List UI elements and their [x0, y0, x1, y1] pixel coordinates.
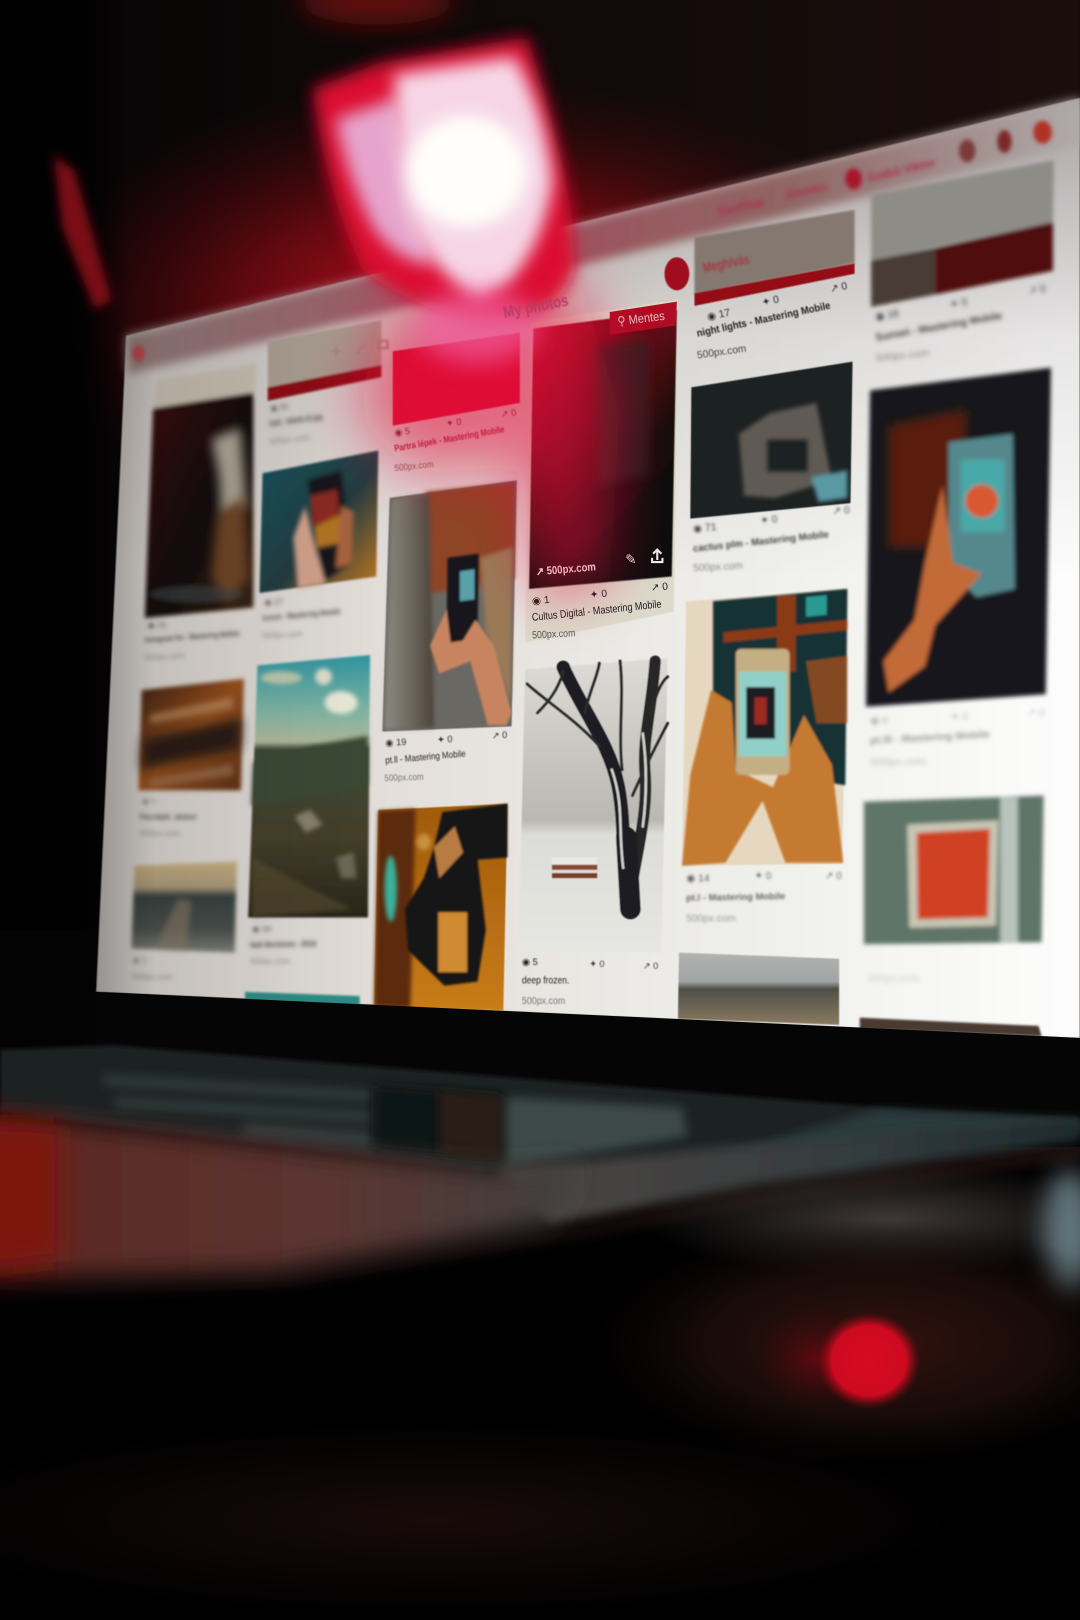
column 6 captions: ↗ 0	[1028, 284, 1047, 297]
table reflection blue edge	[1043, 1170, 1080, 1294]
column 6 captions: ◉ 0	[870, 716, 888, 727]
photo: city	[131, 862, 237, 953]
flare: pink tail onto screen	[418, 288, 537, 363]
column 1 captions: 500px.com	[140, 829, 180, 838]
photo: autumn foliage	[139, 679, 244, 790]
column 6 captions: pt.lll - Mastering Mobile	[870, 730, 990, 747]
photo: hand holding phone, dark	[866, 368, 1051, 707]
column 6 captions: ✦ 0	[949, 297, 968, 311]
red light spilling on screen	[357, 279, 620, 599]
flare: white core	[407, 116, 527, 227]
toolbar icons on card	[331, 341, 388, 356]
column 5 photos: Meghívás	[701, 252, 751, 276]
column 5 captions: 500px.com	[686, 914, 736, 925]
deck front edge	[496, 1120, 1080, 1223]
column 3 captions: pt.ll - Mastering Mobile	[385, 749, 466, 766]
top red blur	[300, 0, 455, 25]
keyboard key rows left	[103, 1074, 372, 1149]
keyboard reflection right	[506, 1097, 687, 1167]
column 1 captions: ◉ 31	[148, 620, 167, 630]
column 2 captions: DSC_00045-f2.jpg	[269, 412, 323, 429]
photo: mountain landscape	[248, 655, 370, 917]
column 5 captions	[686, 281, 851, 925]
photo: hands with phone, dark	[690, 362, 853, 519]
dim photo strip at bottom right	[860, 1018, 1042, 1036]
left lower shadow	[0, 930, 95, 1064]
page heading: My photos	[501, 291, 570, 322]
highlighted column 4 card: ↗ 0	[650, 581, 669, 594]
toolbar labels	[717, 155, 937, 219]
column 4 lower photo: snowy tree: ✦ 0	[589, 959, 605, 969]
photo: dark red-tinted screen photo	[529, 310, 677, 589]
column 3 captions: ↗ 0	[492, 730, 508, 741]
red palm rest	[0, 1112, 579, 1279]
save button: ⚲ Mentes	[617, 309, 666, 328]
keyboard reflection brown	[439, 1090, 502, 1161]
red profile dot	[664, 257, 689, 290]
column 1 captions: ◉ 5	[132, 956, 147, 965]
column 1 captions: Fény képek - abstract	[140, 812, 197, 821]
column 5 captions: ◉ 17	[706, 308, 732, 323]
left red streak	[54, 155, 112, 310]
column 2 photos	[245, 320, 388, 1006]
screen surface	[96, 98, 1080, 1038]
toolbar labels: KezdŐlap	[717, 193, 767, 219]
laptop screen	[96, 98, 1080, 1038]
column 5 captions: ✦ 0	[760, 514, 778, 527]
toolbar labels: Követés	[785, 179, 828, 202]
column 1 captions: Instagram for - Mastering Mobile	[144, 629, 240, 645]
column 6 captions	[868, 284, 1047, 985]
column 5 captions: ↗ 0	[832, 505, 851, 518]
photo: red-tinted dark	[393, 333, 520, 426]
column 6 captions: 500px.com	[870, 757, 926, 769]
table reflection grey	[641, 1162, 1080, 1276]
keyboard reflection middle	[374, 1085, 502, 1162]
column 2 captions: 500px.com	[250, 957, 291, 966]
column 4 lower photo: snowy tree: 500px.com	[522, 996, 565, 1007]
photo: red square aerial	[864, 796, 1044, 944]
column 5 captions: ◉ 14	[686, 873, 710, 884]
column 2 captions: bad decisions - 2018	[250, 939, 317, 949]
red glow behind screen	[21, 77, 909, 542]
top toolbar band	[126, 98, 1080, 374]
column 2 captions: 500px.com	[269, 433, 310, 446]
highlighted column 4 card: Cultus Digital - Mastering Mobile	[531, 598, 662, 624]
column 6 captions: 500px.com	[868, 974, 920, 985]
column 5 captions: 500px.com	[696, 344, 747, 361]
left shadow band	[0, 0, 129, 1074]
column 6 photos	[864, 160, 1054, 944]
column 6 captions: 500px.com	[875, 348, 930, 365]
column 3 captions: ◉ 5	[394, 426, 411, 438]
column 5 captions: cactus plm - Mastering Mobile	[693, 529, 830, 555]
column 1 captions: 500px.com	[132, 972, 173, 981]
toolbar labels: Szabó Viktor	[866, 155, 937, 185]
bottom bezel	[0, 992, 1080, 1147]
source link: ↗ 500px.com	[536, 561, 596, 578]
photo: hand with phone on blue	[259, 450, 378, 593]
column 4 lower photo: snowy tree: deep frozen.	[522, 976, 569, 987]
column 5 photos	[678, 210, 855, 1025]
toolbar avatars	[132, 121, 1052, 362]
column 2 captions: invest - Mastering Mobile	[262, 607, 341, 623]
highlighted column 4 card: ✦ 0	[589, 589, 608, 601]
faint table reflection	[0, 1421, 971, 1617]
column 5 captions: pt.l - Mastering Mobile	[686, 891, 785, 903]
column 2 captions: ◉ 34	[252, 925, 271, 934]
card background	[525, 300, 678, 643]
photo: teal strip	[245, 992, 360, 1006]
column 4 lower photo: snowy tree: ◉ 5	[522, 957, 538, 967]
caption: ◉ 1	[532, 595, 550, 607]
screen top dimming	[114, 98, 1080, 579]
column 6 captions: ◉ 16	[875, 308, 900, 323]
column 5 captions: ↗ 0	[825, 871, 842, 882]
column 5 captions: ✦ 0	[761, 294, 780, 309]
lens flare	[313, 37, 575, 363]
table reflection dark red	[589, 1219, 1080, 1467]
column 1 captions	[132, 620, 240, 981]
column 5 captions: ◉ 71	[693, 522, 717, 535]
highlighted column 4 card	[525, 300, 678, 643]
column 2 captions: ◉ 27	[264, 597, 284, 607]
column 5 captions: 500px.com	[693, 561, 743, 574]
save button	[610, 302, 677, 335]
column 3 photos	[374, 333, 520, 1010]
column 1 photos	[131, 364, 256, 953]
highlighted column 4 card: 500px.com	[532, 628, 576, 641]
column 4 lower photo: snowy tree: ↗ 0	[643, 961, 658, 971]
column 3 captions: Partra lépek - Mastering Mobile	[393, 424, 505, 453]
column 3 captions: ↗ 0	[500, 407, 517, 419]
photo: hands holding phone in corridor	[382, 480, 517, 731]
column 1 captions: ◉ 5	[142, 797, 156, 806]
light core	[817, 1312, 921, 1409]
red left edge of palm rest	[0, 1121, 62, 1271]
table shadow	[0, 1157, 1080, 1620]
column 3 captions: ✦ 0	[445, 417, 462, 429]
column 5 captions: ↗ 0	[829, 281, 849, 295]
flare: white lobe	[395, 57, 553, 300]
edit icon: ✎	[625, 552, 636, 567]
column 2 captions: ◉ 31	[270, 402, 290, 413]
screen left shading	[96, 98, 1080, 1038]
column 3 captions: ◉ 19	[385, 737, 407, 748]
column 4 lower photo: snowy tree	[519, 658, 668, 1007]
flare: red halo	[313, 37, 575, 322]
column 6 captions: ↗ 0	[1027, 708, 1045, 719]
column 3 captions: ✦ 0	[437, 734, 453, 745]
photo: camera with warm background	[374, 804, 507, 1010]
photo: two hands with phone on teal and orange	[682, 589, 847, 866]
flare: lavender lobe	[336, 98, 434, 264]
column 6 captions: Sunset - Mastering Mobile	[875, 311, 1003, 344]
column 2 captions: 500px.com	[262, 629, 303, 640]
photo: silhouette with starburst	[145, 393, 253, 618]
photo: distant city	[678, 953, 839, 1025]
keyboard deck	[0, 1046, 1080, 1171]
light halo	[754, 1307, 878, 1410]
red indicator light	[754, 1307, 921, 1410]
column 6 captions: ✦ 0	[951, 712, 968, 723]
column 3 captions: 500px.com	[394, 459, 434, 473]
column 2 captions	[250, 402, 341, 966]
column 1 captions: 500px.com	[144, 651, 185, 662]
column 3 captions	[384, 407, 517, 783]
right deck surface	[723, 1110, 1080, 1155]
column 5 captions: night lights - Mastering Mobile	[696, 301, 832, 340]
column 5 captions: ✦ 0	[754, 871, 772, 882]
laptop bezel and base	[0, 930, 1080, 1620]
column 3 captions: 500px.com	[384, 772, 424, 783]
share icon	[652, 550, 662, 562]
